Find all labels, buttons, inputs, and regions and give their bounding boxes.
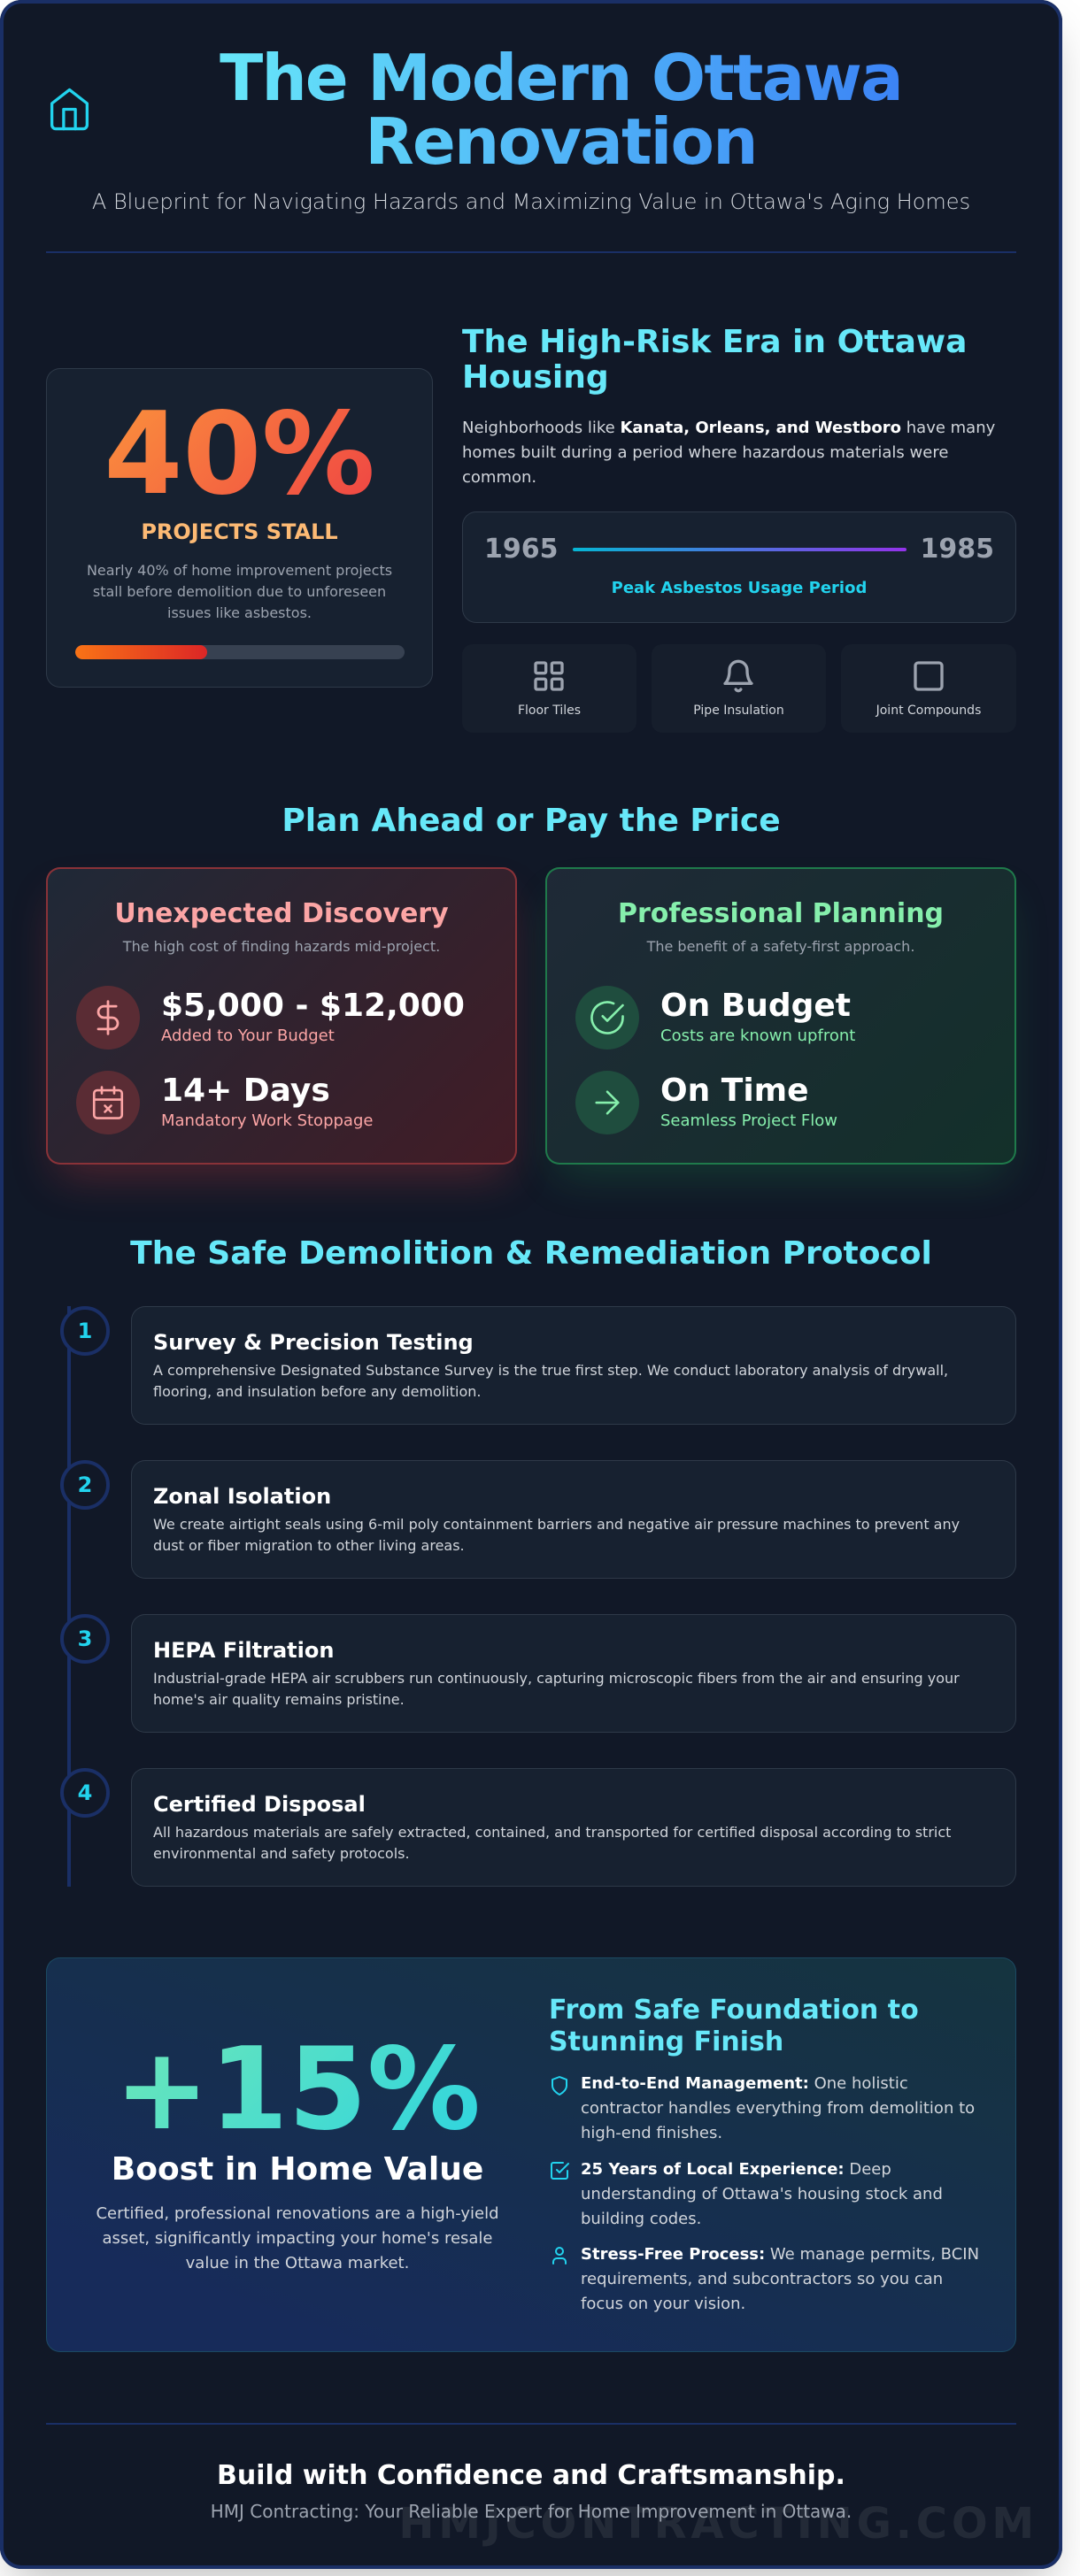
step text: We create airtight seals using 6-mil poly containment barriers and negative air pressure machines to prevent any bbox=[153, 1516, 960, 1533]
material: floor tiles bbox=[462, 644, 636, 733]
panel: professional planning bbox=[545, 867, 1016, 1165]
stat label: PROJECTS STALL bbox=[141, 519, 338, 544]
step number bbox=[60, 1614, 110, 1664]
step number bbox=[60, 1460, 110, 1510]
heading: plan ahead: Plan Ahead or Pay the Price bbox=[282, 803, 781, 839]
benefit text: Stress-Free Process: We manage permits, BCIN bbox=[581, 2245, 979, 2264]
icon: check square bbox=[551, 2162, 569, 2180]
step 2 bbox=[60, 1460, 1016, 1579]
step title: Zonal Isolation bbox=[153, 1484, 331, 1509]
stat caption: Mandatory Work Stoppage bbox=[161, 1111, 373, 1130]
title bbox=[212, 46, 910, 173]
stat description: stall before demolition due to unforeseen bbox=[93, 583, 386, 600]
step text: home's air quality remains pristine. bbox=[153, 1691, 405, 1708]
heading: high-risk era: Housing bbox=[462, 359, 609, 396]
stat description: issues like asbestos. bbox=[167, 604, 312, 621]
stat: on time bbox=[575, 1071, 837, 1134]
section: protocol timeline bbox=[60, 1235, 1016, 1887]
heading: safe foundation bbox=[549, 1995, 919, 2057]
step text bbox=[153, 1670, 960, 1708]
footer bbox=[46, 2423, 1016, 2522]
stat caption: Added to Your Budget bbox=[161, 1027, 335, 1045]
icon: arrow right bbox=[575, 1071, 639, 1134]
step text: Industrial-grade HEPA air scrubbers run continuously, capturing microscopic fibers from the air and ensuring your bbox=[153, 1670, 960, 1687]
subtitle: A Blueprint for Navigating Hazards and Maximizing Value in Ottawa's Aging Homes bbox=[92, 189, 970, 214]
title: Renovation bbox=[365, 104, 757, 179]
icon: check circle bbox=[575, 986, 639, 1050]
section: high-risk era bbox=[46, 324, 1016, 718]
footer headline: Build with Confidence and Craftsmanship. bbox=[217, 2460, 845, 2491]
header divider bbox=[46, 251, 1016, 253]
benefit: end-to-end bbox=[552, 2074, 975, 2142]
timeline 1965-1985 bbox=[462, 511, 1016, 623]
card heading: Professional Planning bbox=[618, 898, 944, 929]
stat description: asset, significantly impacting your home's resale bbox=[102, 2229, 493, 2248]
label: Joint Compounds bbox=[876, 704, 981, 718]
step 1 bbox=[60, 1306, 1016, 1425]
icon: bell bbox=[723, 660, 753, 692]
step text: All hazardous materials are safely extracted, contained, and transported for certified disposal according to strict bbox=[153, 1824, 951, 1841]
step number: 4 bbox=[78, 1780, 92, 1805]
intro paragraph: common. bbox=[462, 468, 536, 487]
card heading: Unexpected Discovery bbox=[114, 898, 449, 929]
material: joint compounds bbox=[841, 644, 1016, 733]
benefit text: understanding of Ottawa's housing stock and bbox=[581, 2185, 943, 2203]
stat value: 14+ Days bbox=[161, 1073, 330, 1109]
timeline spine bbox=[67, 1306, 71, 1887]
heading: safe foundation: Stunning Finish bbox=[549, 2026, 783, 2057]
step text: A comprehensive Designated Substance Survey is the true first step. We conduct laboratory analysis of drywall, bbox=[153, 1362, 948, 1379]
stat value: $5,000 - $12,000 bbox=[161, 988, 465, 1024]
benefit text: focus on your vision. bbox=[581, 2295, 745, 2313]
title: The Modern Ottawa bbox=[220, 41, 902, 115]
step text bbox=[153, 1516, 960, 1554]
benefit text: requirements, and subcontractors so you can bbox=[581, 2270, 943, 2288]
hazardous materials row bbox=[518, 660, 981, 718]
label: Floor Tiles bbox=[518, 704, 581, 718]
step number bbox=[60, 1768, 110, 1818]
stat description bbox=[87, 562, 392, 621]
step number: 1 bbox=[78, 1319, 92, 1343]
step number bbox=[60, 1306, 110, 1356]
footer divider bbox=[46, 2423, 1016, 2425]
big stat: 40%: 40% bbox=[104, 388, 375, 520]
step 3 bbox=[60, 1614, 1016, 1733]
watermark: HMJCONTRACTING.COM bbox=[398, 2499, 1038, 2549]
stat description bbox=[96, 2204, 499, 2272]
stat: on budget bbox=[575, 986, 855, 1050]
step title: HEPA Filtration bbox=[153, 1638, 334, 1663]
start year: 1965 bbox=[484, 534, 558, 565]
step number: 2 bbox=[78, 1473, 92, 1497]
step card bbox=[131, 1614, 1016, 1733]
heading: safe foundation: From Safe Foundation to bbox=[549, 1995, 919, 2026]
stat: added cost bbox=[76, 986, 465, 1050]
stat description: Certified, professional renovations are a high-yield bbox=[96, 2204, 499, 2223]
step title: Certified Disposal bbox=[153, 1792, 366, 1817]
timeline bar bbox=[573, 548, 906, 551]
icon: calendar x bbox=[76, 1071, 140, 1134]
icon: grid bbox=[534, 661, 564, 691]
icon: house bbox=[50, 88, 89, 131]
benefit text: building codes. bbox=[581, 2210, 701, 2228]
step text: flooring, and insulation before any demolition. bbox=[153, 1383, 481, 1400]
benefit text: End-to-End Management: One holistic bbox=[581, 2074, 908, 2093]
stat description: Nearly 40% of home improvement projects bbox=[87, 562, 392, 579]
heading: high-risk era bbox=[462, 324, 967, 396]
benefit: stress-free bbox=[552, 2245, 979, 2313]
icon: square bbox=[914, 661, 944, 691]
step text: dust or fiber migration to other living areas. bbox=[153, 1537, 465, 1554]
big stat: +15%: +15% bbox=[114, 2024, 481, 2156]
panel: value boost bbox=[46, 1957, 1016, 2352]
step card bbox=[131, 1306, 1016, 1425]
benefit text: contractor handles everything from demolition to bbox=[581, 2099, 975, 2118]
stat caption: Costs are known upfront bbox=[660, 1027, 855, 1045]
intro paragraph bbox=[462, 419, 995, 487]
step number: 3 bbox=[78, 1626, 92, 1651]
step text: environmental and safety protocols. bbox=[153, 1845, 410, 1862]
step text bbox=[153, 1362, 948, 1400]
stat: work stoppage bbox=[76, 1071, 373, 1134]
step card bbox=[131, 1768, 1016, 1887]
material: pipe insulation bbox=[652, 644, 826, 733]
heading: high-risk era: The High-Risk Era in Ottawa bbox=[462, 324, 967, 360]
panel: unexpected discovery bbox=[46, 867, 517, 1165]
step 4 bbox=[60, 1768, 1016, 1887]
stat value: On Time bbox=[660, 1073, 809, 1109]
step title: Survey & Precision Testing bbox=[153, 1330, 474, 1355]
benefit text bbox=[581, 2160, 943, 2228]
intro paragraph: Neighborhoods like Kanata, Orleans, and Westboro have many bbox=[462, 419, 995, 437]
stat caption: Seamless Project Flow bbox=[660, 1111, 837, 1130]
step text bbox=[153, 1824, 951, 1862]
card subtitle: The benefit of a safety-first approach. bbox=[647, 938, 914, 955]
icon: shield bbox=[552, 2076, 567, 2095]
section: plan ahead comparison bbox=[34, 803, 1018, 1198]
heading: protocol: The Safe Demolition & Remediation Protocol bbox=[130, 1235, 932, 1272]
card subtitle: The high cost of finding hazards mid-project. bbox=[123, 938, 440, 955]
benefit text bbox=[581, 2074, 975, 2142]
footer tagline: HMJ Contracting: Your Reliable Expert for Home Improvement in Ottawa. bbox=[211, 2501, 852, 2522]
label: Pipe Insulation bbox=[693, 704, 784, 718]
header bbox=[46, 41, 1016, 253]
stat value: On Budget bbox=[660, 988, 851, 1024]
stat description: value in the Ottawa market. bbox=[186, 2254, 409, 2272]
icon: user bbox=[552, 2247, 567, 2265]
panel: 40% projects stall bbox=[46, 368, 433, 688]
benefit: local experience bbox=[551, 2160, 943, 2228]
timeline caption: Peak Asbestos Usage Period bbox=[612, 579, 867, 597]
benefit text: 25 Years of Local Experience: Deep bbox=[581, 2160, 891, 2179]
benefit text: high-end finishes. bbox=[581, 2124, 722, 2142]
stat title: Boost in Home Value bbox=[112, 2151, 483, 2188]
step card bbox=[131, 1460, 1016, 1579]
end year: 1985 bbox=[921, 534, 994, 565]
intro paragraph: homes built during a period where hazardous materials were bbox=[462, 443, 948, 462]
benefit text bbox=[581, 2245, 979, 2313]
progress bar bbox=[75, 645, 405, 659]
icon: dollar bbox=[76, 986, 140, 1050]
